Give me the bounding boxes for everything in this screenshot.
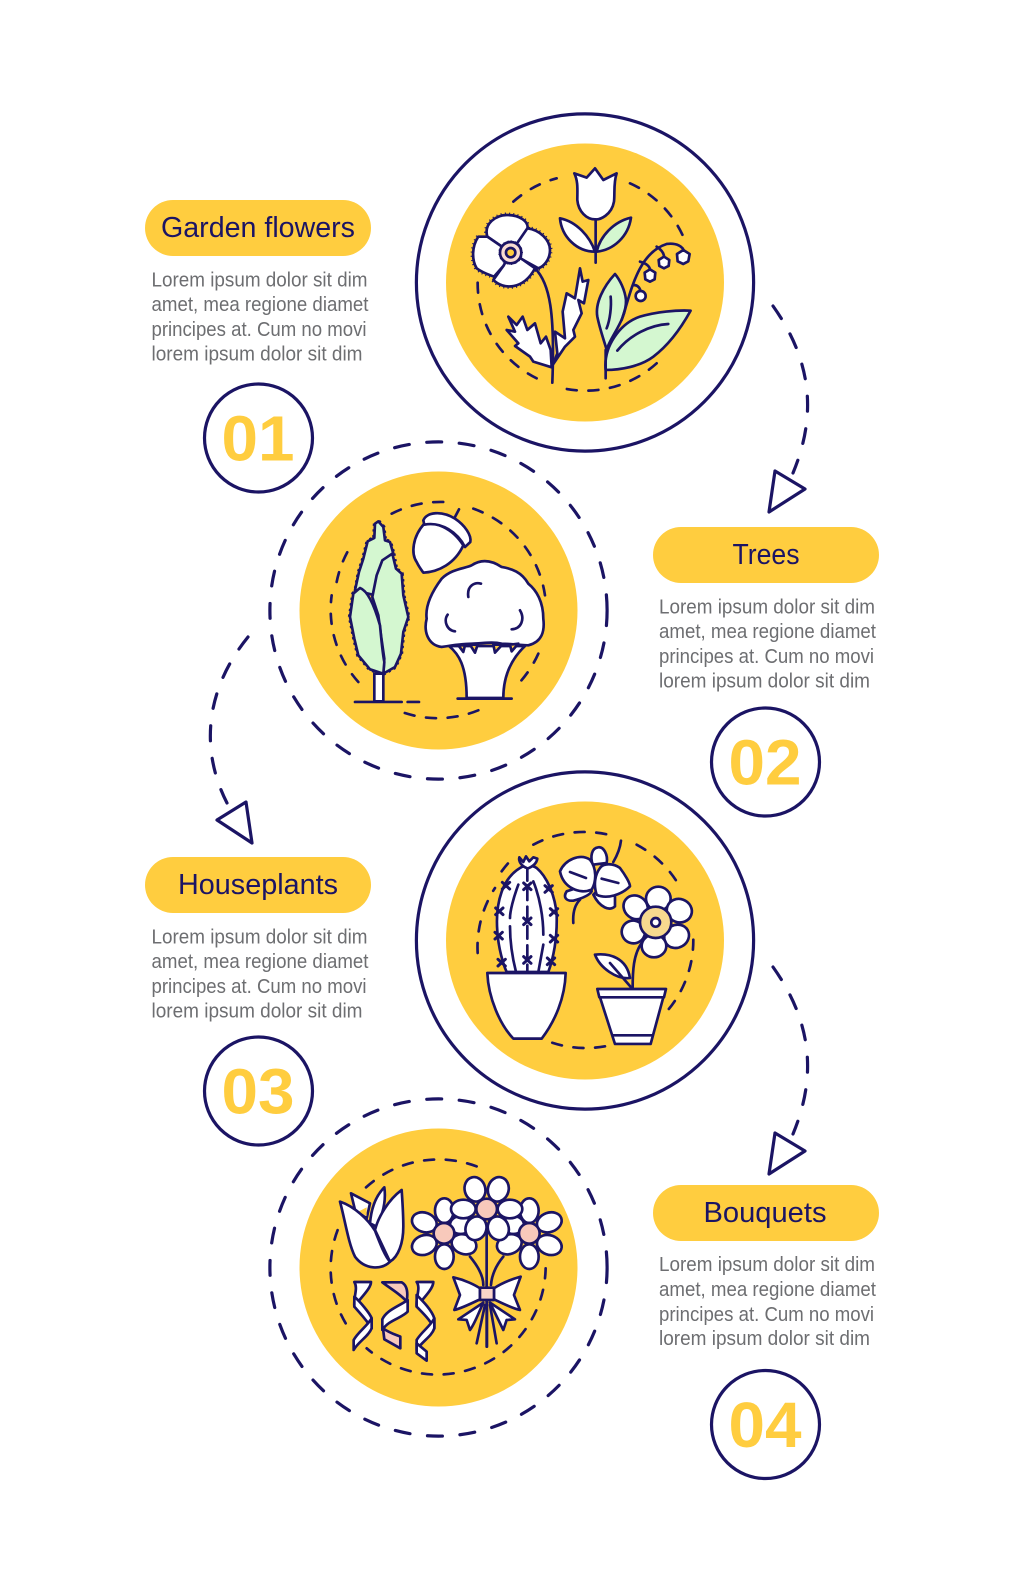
text block: bouquets description: amet, mea regione diamet (659, 1279, 876, 1301)
icon: garden flowers (473, 168, 691, 391)
pill heading: Bouquets (653, 1185, 879, 1241)
text block: trees description: lorem ipsum dolor sit dim (659, 670, 870, 692)
number badge 03: 03 (222, 1056, 294, 1128)
text block: houseplants description (152, 926, 369, 1022)
number badge 01: 01 (222, 402, 294, 474)
text block: trees description: principes at. Cum no movi (659, 646, 874, 668)
number badge 02: 02 (728, 726, 802, 798)
text block: garden flowers description (152, 270, 369, 366)
number badge 03 (204, 1037, 312, 1145)
pill heading: Trees (653, 527, 879, 583)
text block: trees description (659, 596, 876, 692)
number badge 01 (204, 384, 312, 492)
text block: houseplants description: lorem ipsum dolor sit dim (152, 1000, 362, 1022)
text block: houseplants description: amet, mea regione diamet (152, 951, 369, 973)
text block: bouquets description: principes at. Cum no movi (659, 1304, 874, 1326)
panel: garden flowers circle (416, 114, 754, 451)
number badge 04 (712, 1370, 820, 1478)
pill heading: Trees: Trees (732, 539, 800, 571)
pill heading: Garden flowers: Garden flowers (161, 212, 355, 244)
text block: bouquets description: lorem ipsum dolor sit dim (659, 1328, 870, 1350)
pill heading: Houseplants (145, 857, 371, 913)
pill heading: Garden flowers (145, 200, 371, 256)
text block: trees description: amet, mea regione diamet (659, 621, 876, 643)
pill heading: Houseplants: Houseplants (178, 869, 338, 901)
panel: bouquets circle (270, 1099, 607, 1436)
arrow: trees to houseplants (210, 637, 252, 843)
icon: bouquets (331, 1159, 565, 1375)
number badge 04: 04 (728, 1389, 802, 1461)
text block: bouquets description (659, 1254, 876, 1350)
text block: houseplants description: principes at. Cum no movi (152, 976, 366, 998)
panel: trees circle (270, 442, 607, 779)
text block: garden flowers description: lorem ipsum dolor sit dim (152, 344, 362, 366)
text block: bouquets description: Lorem ipsum dolor sit dim (659, 1254, 875, 1276)
icon: houseplants (477, 832, 695, 1048)
text block: garden flowers description: principes at. Cum no movi (152, 319, 366, 341)
number badge 02 (712, 708, 820, 816)
arrow: flowers to trees (769, 306, 808, 512)
text block: houseplants description: Lorem ipsum dolor sit dim (152, 926, 368, 948)
icon: trees (331, 502, 545, 718)
arrow: houseplants to bouquets (769, 967, 808, 1174)
text block: trees description: Lorem ipsum dolor sit dim (659, 596, 875, 618)
text block: garden flowers description: Lorem ipsum dolor sit dim (152, 270, 368, 292)
text block: garden flowers description: amet, mea regione diamet (152, 294, 369, 316)
pill heading: Bouquets: Bouquets (704, 1197, 826, 1229)
panel: houseplants circle (416, 772, 754, 1109)
